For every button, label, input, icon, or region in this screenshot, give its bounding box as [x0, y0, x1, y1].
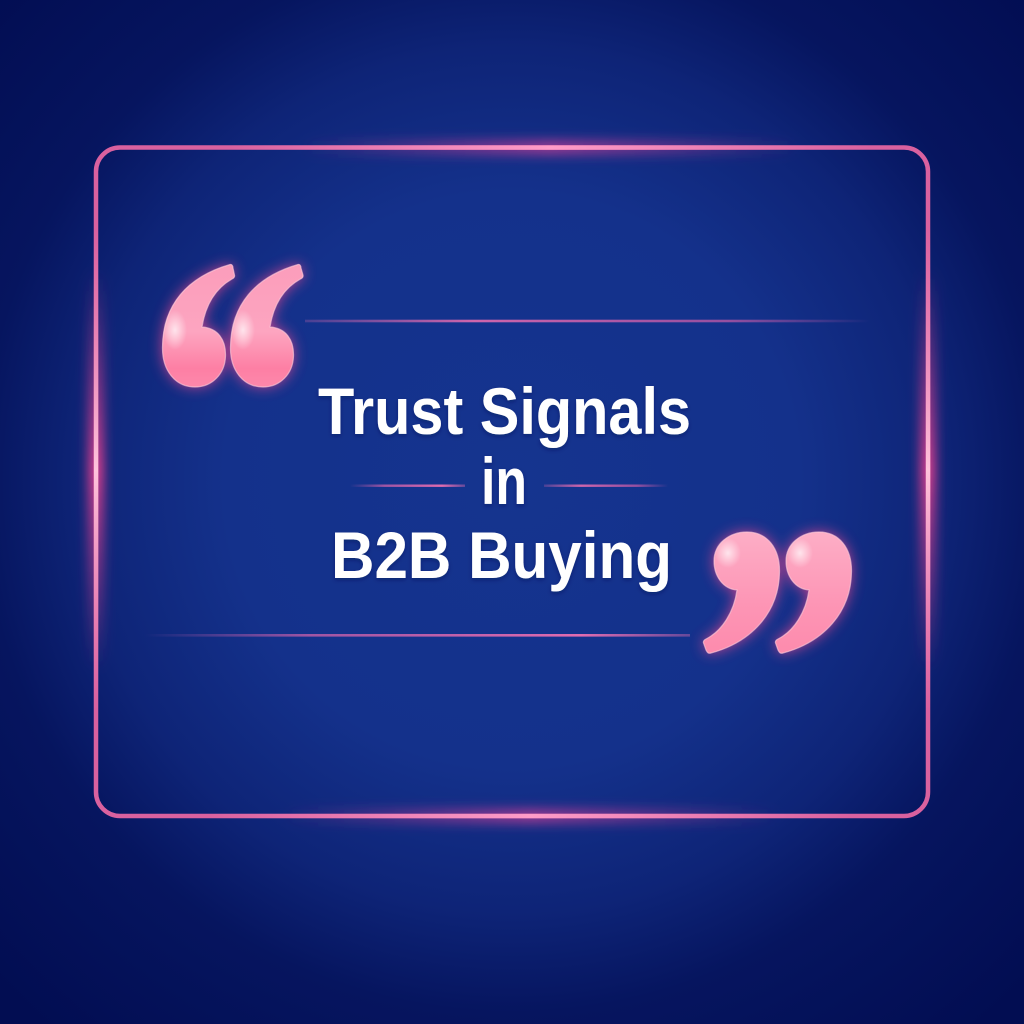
icon: closing quotation mark: [703, 532, 852, 653]
title: in: [481, 444, 527, 518]
divider line: upper: [305, 320, 870, 322]
icon: opening quotation mark: [162, 264, 303, 387]
panel: glowing frame: [89, 141, 935, 822]
title: Trust Signals: [318, 374, 691, 448]
divider line: right of in: [544, 484, 668, 487]
divider line: lower: [145, 634, 690, 637]
divider line: left of in: [350, 484, 465, 487]
title: [318, 374, 691, 592]
title: B2B Buying: [331, 518, 672, 592]
